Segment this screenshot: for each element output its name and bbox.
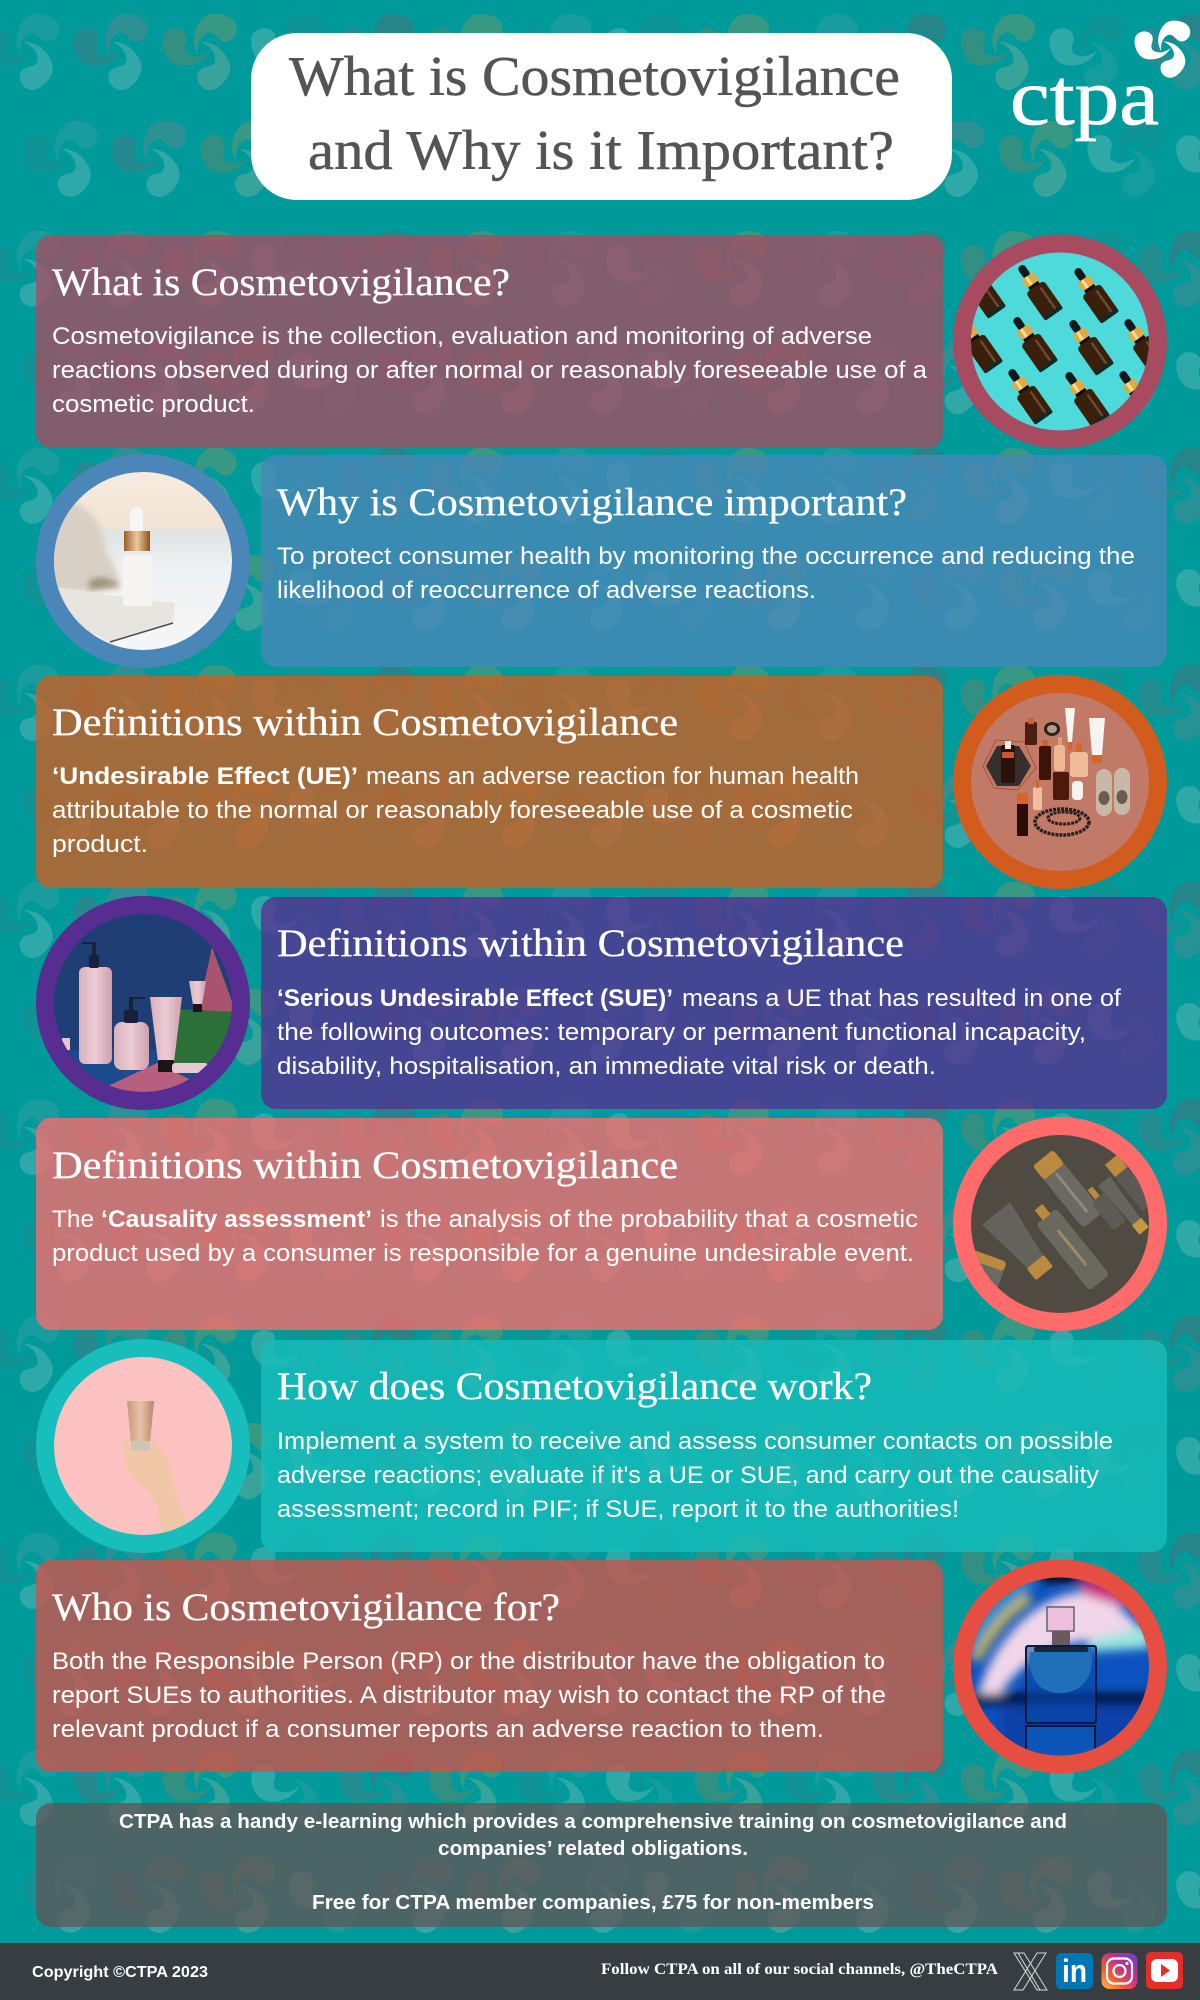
callout: e-learning [36,1803,1167,1927]
text block [277,1428,1113,1523]
social follow text: Follow CTPA on all of our social channels, @TheCTPA [601,1961,998,1978]
text block: companies’ related obligations. [438,1838,748,1860]
heading: Definitions within Cosmetovigilance [52,701,678,744]
text block: means a UE that has resulted in one of [682,985,1121,1012]
title: What is Cosmetovigilance [289,46,900,108]
text block [119,1811,1067,1914]
logo: ctpa [1010,14,1194,142]
text block: is the analysis of the probability that a cosmetic [380,1206,918,1233]
title: and Why is it Important? [308,120,894,182]
text block: product used by a consumer is responsible for a genuine undesirable event. [52,1240,914,1267]
text block: assessment; record in PIF; if SUE, report it to the authorities! [277,1496,959,1523]
text block [277,543,1135,604]
text block: Both the Responsible Person (RP) or the distributor have the obligation to [52,1648,885,1675]
icon: X [1014,1953,1047,1990]
icon: photo of hand holding tube on pink [36,1339,250,1553]
text block [52,1648,886,1743]
icon: photo of cosmetics flat-lay on terracotta [953,675,1167,889]
text block: adverse reactions; evaluate if it's a UE or SUE, and carry out the causality [277,1462,1099,1489]
panel: what is cosmetovigilance [36,235,943,448]
footer bar [0,1943,1200,2000]
heading: Why is Cosmetovigilance important? [277,481,907,524]
icon: photo of amber dropper bottles [951,234,1169,448]
icon: photo of pink bottles on navy [36,896,250,1110]
text block: The [52,1206,94,1233]
text block: Free for CTPA member companies, £75 for non-members [312,1892,874,1914]
panel: definitions serious undesirable effect [261,897,1167,1109]
text block: disability, hospitalisation, an immediate vital risk or death. [277,1053,936,1080]
text block: ‘Causality assessment’ [101,1206,372,1233]
panel: definitions undesirable effect [36,676,943,888]
text block: relevant product if a consumer reports an adverse reaction to them. [52,1716,824,1743]
icon: photo of perfume bottle on colourful blue [953,1560,1167,1774]
text block: To protect consumer health by monitoring the occurrence and reducing the [277,543,1135,570]
text block: likelihood of reoccurrence of adverse reactions. [277,577,816,604]
icon: Instagram [1102,1953,1138,1989]
text block: reactions observed during or after normal or reasonably foreseeable use of a [52,357,928,384]
panel: why is cosmetovigilance important [261,455,1167,667]
text block [52,323,928,418]
heading: How does Cosmetovigilance work? [277,1365,872,1408]
text block: report SUEs to authorities. A distributor may wish to contact the RP of the [52,1682,886,1709]
icon: YouTube [1146,1952,1183,1989]
text block [52,1206,918,1267]
text block: ‘Undesirable Effect (UE)’ [52,763,358,790]
heading: Definitions within Cosmetovigilance [52,1144,678,1187]
icon: photo of white serum bottle on marble [36,454,250,668]
icon: photo of grey and gold cosmetics [945,1117,1167,1331]
text block: Cosmetovigilance is the collection, evaluation and monitoring of adverse [52,323,872,350]
text block: ‘Serious Undesirable Effect (SUE)’ [277,985,673,1012]
panel: definitions causality assessment [36,1118,943,1330]
panel: who is cosmetovigilance for [36,1560,943,1772]
heading: Who is Cosmetovigilance for? [52,1586,560,1629]
text block: the following outcomes: temporary or permanent functional incapacity, [277,1019,1086,1046]
panel: how does cosmetovigilance work [261,1340,1167,1552]
title [251,33,952,200]
text block: product. [52,831,148,858]
text block: attributable to the normal or reasonably foreseeable use of a cosmetic [52,797,853,824]
text block: cosmetic product. [52,391,255,418]
icon: LinkedIn: in [1062,1953,1087,1989]
text block: CTPA has a handy e-learning which provides a comprehensive training on cosmetovigilance and [119,1811,1067,1833]
text block: means an adverse reaction for human health [366,763,859,790]
heading: Definitions within Cosmetovigilance [277,922,904,965]
logo: ctpa: ctpa [1010,54,1159,142]
heading: What is Cosmetovigilance? [52,261,510,304]
text block [277,985,1121,1080]
text block [52,763,859,858]
copyright: Copyright ©CTPA 2023 [32,1964,208,1981]
text block: Implement a system to receive and assess consumer contacts on possible [277,1428,1113,1455]
